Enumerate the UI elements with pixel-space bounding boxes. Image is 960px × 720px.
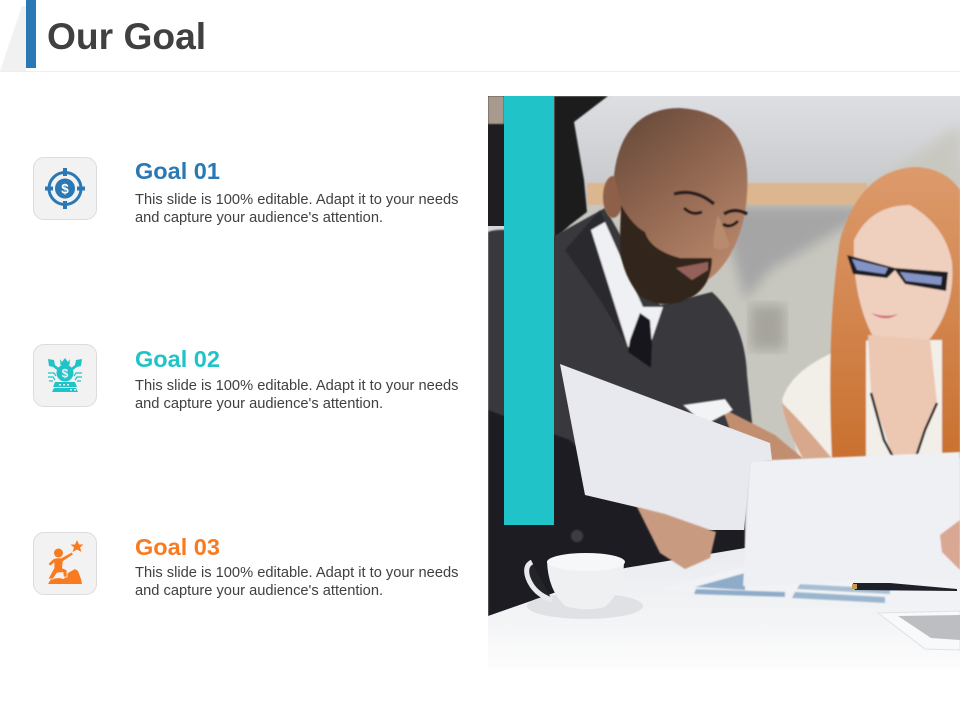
text block: goal 03: This slide is 100% editable. Adapt it to your needs (135, 565, 458, 581)
text block: goal 01 (135, 158, 458, 226)
text block: goal 01: This slide is 100% editable. Adapt it to your needs (135, 192, 458, 208)
icon card: coin with crown and arrows (33, 344, 97, 407)
table (488, 545, 960, 669)
pen (852, 583, 957, 591)
text block: goal 02: This slide is 100% editable. Adapt it to your needs (135, 378, 458, 394)
text block: goal 01: Goal 01 (135, 158, 220, 184)
man's head (603, 108, 747, 304)
woman's hand (940, 520, 960, 570)
man's lower hand (637, 507, 716, 569)
man's suit (488, 208, 752, 620)
icon card: target with dollar: $ (61, 182, 69, 196)
right paper (743, 452, 960, 586)
text block: goal 02: Goal 02 (135, 346, 220, 372)
text block: goal 03 (135, 534, 458, 599)
printed charts on table (658, 568, 960, 606)
coffee cup and saucer (527, 553, 643, 619)
woman (782, 167, 960, 462)
text block: goal 03: and capture your audience's attention. (135, 583, 383, 599)
photo: business people reviewing papers (488, 96, 960, 650)
header accent: grey slant (0, 6, 26, 71)
photo background (488, 96, 960, 669)
text block: goal 02: and capture your audience's attention. (135, 396, 383, 412)
icon card: coin with crown and arrows: $ (62, 366, 69, 380)
header accent: blue bar (26, 0, 36, 68)
text block: goal 03: Goal 03 (135, 534, 220, 560)
man's hand and cuff (683, 399, 805, 462)
text block: goal 02 (135, 346, 458, 412)
teal vertical bar over photo (504, 96, 554, 525)
left paper (560, 364, 772, 530)
icon card: climber reaching star (33, 532, 97, 595)
icon card: target with dollar (33, 157, 97, 220)
text block: goal 01: and capture your audience's attention. (135, 210, 383, 226)
tablet (878, 611, 960, 650)
title: Our Goal (47, 15, 206, 57)
